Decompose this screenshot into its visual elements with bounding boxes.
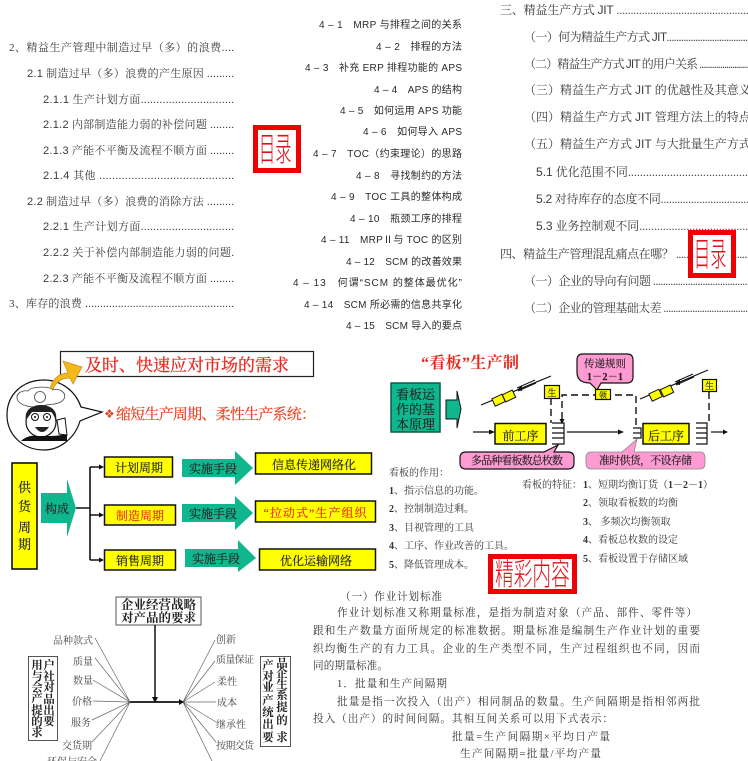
labels: left requirements: 交货期 bbox=[62, 739, 92, 752]
panel: left table of contents: 2.1.4 其他 .......................................... bbox=[43, 168, 234, 182]
panel: middle table of contents: 4 – 6 如何导入 APS bbox=[363, 125, 462, 138]
box: user and society requirements: 求 bbox=[31, 725, 43, 739]
box: next process bbox=[643, 424, 689, 444]
box: transport network: 优化运输网络 bbox=[280, 553, 352, 568]
arrow: composition bbox=[41, 479, 76, 537]
text: production planning standards: 跟和生产数量方面所规定的标准数据。期量标准是编制生产作业计划的重要 bbox=[313, 624, 700, 637]
text: features of kanban: 5、看板设置于存储区域 bbox=[583, 552, 688, 565]
panel: product requirements fishbone bbox=[28, 597, 290, 761]
callout: transfer rule bbox=[577, 354, 633, 390]
panel: left table of contents: 2.2 制造过早（多）浪费的消除方法 ......... bbox=[27, 194, 234, 208]
panel: left table of contents: 2.2.2 关于补偿内部制造能力弱的问题. bbox=[43, 245, 234, 259]
box: enterprise production requirements: 业 bbox=[262, 680, 274, 694]
labels: right requirements: 成本 bbox=[217, 696, 237, 709]
text: features of kanban: 3、 多频次均衡领取 bbox=[583, 515, 670, 528]
text: functions of kanban: 3、目视管理的工具 bbox=[389, 521, 475, 534]
arrow: composition: 构成 bbox=[45, 501, 69, 516]
arrow: implementation 1: 实施手段 bbox=[189, 462, 237, 476]
panel: middle table of contents: 4 – 11 MRPⅡ与 TOC 的区别 bbox=[321, 233, 462, 246]
box: user and society requirements: 对 bbox=[43, 680, 55, 694]
subheading: shorten production cycle: 缩短生产周期、柔性生产系统： bbox=[116, 406, 316, 423]
text: production planning standards: 投入（出产）的时间间隔。其相互间关系可以用下式表示： bbox=[313, 712, 613, 725]
labels: left requirements: 品种款式 bbox=[53, 634, 93, 647]
box: enterprise production requirements: 对 bbox=[262, 669, 274, 683]
panel: middle table of contents: 4 – 7 TOC（约束理论）的思路 bbox=[313, 147, 462, 160]
box: manufacturing cycle: 制造周期 bbox=[116, 508, 164, 523]
box: production kanban right bbox=[702, 380, 716, 392]
connector branches bbox=[76, 464, 104, 562]
stamp: 目录 left: 目录 bbox=[259, 130, 291, 169]
box: production kanban right: 生 bbox=[705, 380, 714, 391]
panel: middle table of contents: 4 – 5 如何运用 APS 功能 bbox=[340, 104, 462, 117]
box: enterprise production requirements: 企 bbox=[276, 666, 288, 680]
box: enterprise production requirements: 产 bbox=[262, 693, 274, 707]
labels: left requirements: 服务 bbox=[71, 716, 91, 729]
box: enterprise production requirements: 统 bbox=[262, 705, 275, 719]
box: withdrawal kanban bbox=[596, 390, 610, 400]
box: supply cycle: 期 bbox=[18, 537, 31, 552]
box: supply cycle: 供 bbox=[18, 480, 32, 495]
box: strategy requirement: 企业经营战略 bbox=[121, 597, 196, 612]
box: strategy requirement: 对产品的要求 bbox=[121, 610, 196, 625]
box: user and society requirements: 品 bbox=[43, 693, 55, 706]
panel: left table of contents: 2.2.3 产能不平衡及流程不顺方面 ........ bbox=[43, 271, 234, 285]
panel: kanban production system bbox=[389, 353, 728, 571]
callout: kanban total count bbox=[460, 445, 574, 469]
arrow: green block arrow bbox=[446, 391, 461, 428]
text: production planning standards: 生产间隔期=批量/平均产量 bbox=[460, 747, 601, 760]
panel: left table of contents: 2.1 制造过早（多）浪费的产生原因 ......... bbox=[27, 66, 234, 80]
box: next process: 后工序 bbox=[648, 428, 684, 443]
subheading: shorten production cycle: ❖ bbox=[104, 407, 115, 421]
box: user and society requirements: 要 bbox=[43, 714, 55, 728]
box: kanban basic principle bbox=[391, 383, 440, 432]
stamp: highlights: 精彩内容 bbox=[495, 558, 570, 592]
box: enterprise production requirements: 生 bbox=[276, 677, 288, 691]
callout: transfer rule: 1－2－1 bbox=[587, 372, 623, 383]
box: user and society requirements: 社 bbox=[43, 669, 55, 683]
fishbone lines bbox=[92, 625, 216, 761]
box: enterprise production requirements: 品 bbox=[276, 657, 288, 670]
box: information network: 信息传递网络化 bbox=[272, 457, 356, 472]
callout: kanban total count: 多品种看板数总枚数 bbox=[471, 453, 563, 467]
text: features of kanban: 4、看板总枚数的设定 bbox=[583, 533, 678, 546]
stamp: 目录 left bbox=[256, 128, 298, 170]
box: supply cycle: 周 bbox=[18, 520, 31, 535]
panel: middle table of contents: 4 – 2 排程的方法 bbox=[376, 40, 462, 53]
text: functions of kanban: 1、指示信息的功能。 bbox=[389, 484, 484, 497]
text: production planning standards bbox=[313, 590, 700, 760]
box: previous process: 前工序 bbox=[502, 428, 539, 443]
callout: transfer rule: 传递规则 bbox=[584, 357, 626, 370]
labels: right requirements: 按期交货 bbox=[216, 739, 255, 752]
text: functions of kanban bbox=[389, 466, 514, 571]
panel: right table of contents: （三）精益生产方式 JIT 的优越性及其意义 bbox=[524, 82, 748, 97]
heading box: respond to market bbox=[60, 352, 314, 376]
panel: middle table of contents: 4 – 9 TOC 工具的整体构成 bbox=[331, 190, 462, 203]
arrow: implementation 1 bbox=[182, 451, 253, 485]
box: enterprise production requirements: 出 bbox=[262, 717, 274, 731]
panel: right table of contents: （四）精益生产方式 JIT 管理方法上的特点 bbox=[524, 109, 748, 124]
box: enterprise production requirements: 要 bbox=[262, 730, 274, 744]
text: production planning standards: 作业计划标准又称期量标准，是指为制造对象（产品、部件、零件等） bbox=[337, 606, 697, 619]
panel: left table of contents: 2.2.1 生产计划方面.............................. bbox=[43, 219, 234, 233]
box: sales cycle bbox=[104, 550, 176, 570]
stamp: 目录 right: 目录 bbox=[694, 235, 726, 274]
text: functions of kanban: 4、工序、作业改善的工具。 bbox=[389, 539, 514, 552]
box: kanban basic principle: 作的基 bbox=[396, 402, 435, 417]
text: production planning standards: 批量是指一次投入（出产）相同制品的数量。生产间隔期是指相邻两批 bbox=[337, 695, 700, 708]
box: planning cycle bbox=[104, 457, 172, 477]
panel: supply cycle diagram bbox=[7, 352, 376, 572]
arrow: implementation 2: 实施手段 bbox=[189, 507, 237, 521]
panel: left table of contents bbox=[9, 40, 234, 310]
box: user and society requirements: 与 bbox=[31, 669, 43, 683]
box: user and society requirements: 提 bbox=[31, 703, 43, 717]
box: user and society requirements bbox=[28, 656, 58, 740]
panel: right table of contents: （五）精益生产方式 JIT 与大批量生产方式 bbox=[524, 136, 748, 151]
icon: yellow curved arrow bbox=[50, 361, 82, 389]
box: pull production: “拉动式”生产组织 bbox=[264, 505, 367, 520]
arrow: implementation 3: 实施手段 bbox=[192, 552, 240, 566]
panel: left table of contents: 2.1.3 产能不平衡及流程不顺方面 ........ bbox=[43, 143, 234, 157]
labels: right requirements: 继承性 bbox=[216, 718, 246, 731]
box: enterprise production requirements: 系 bbox=[276, 688, 288, 702]
labels: right requirements: 创新 bbox=[216, 633, 236, 646]
labels: right requirements bbox=[216, 633, 255, 752]
text: functions of kanban: 2、控制制造过剩。 bbox=[389, 502, 474, 515]
labels: left requirements bbox=[47, 634, 97, 761]
box: production kanban left: 生 bbox=[547, 387, 557, 398]
box: strategy requirement bbox=[116, 597, 201, 625]
text: features of kanban: 1、短期均衡订货（1－2－1） bbox=[583, 478, 713, 491]
box: pull production bbox=[256, 501, 376, 522]
callout: just in time delivery bbox=[586, 439, 705, 469]
box: user and society requirements: 的 bbox=[31, 714, 43, 728]
labels: left requirements: 价格 bbox=[72, 695, 92, 708]
panel: left table of contents: 2、精益生产管理中制造过早（多）的浪费.... bbox=[9, 40, 234, 54]
panel: middle table of contents bbox=[293, 18, 462, 332]
text: features of kanban: 看板的特征： bbox=[522, 478, 582, 491]
box: user and society requirements: 出 bbox=[43, 703, 55, 717]
labels: left requirements: 数量 bbox=[73, 674, 93, 687]
text: production planning standards: 同的期量标准。 bbox=[313, 659, 388, 672]
text: production planning standards: 织均衡生产的有力工具。企业的生产类型不同，生产过程组织也不同，因而 bbox=[313, 642, 700, 655]
panel: middle table of contents: 4 – 15 SCM 导入的要点 bbox=[346, 319, 462, 332]
panel: left table of contents: 2.1.2 内部制造能力弱的补偿问题 ........ bbox=[43, 117, 234, 131]
box: supply cycle bbox=[12, 463, 37, 569]
arrow: implementation 2 bbox=[182, 496, 253, 530]
box: enterprise production requirements bbox=[260, 656, 290, 746]
box: user and society requirements: 产 bbox=[31, 691, 43, 705]
box: withdrawal kanban: 领 bbox=[599, 390, 608, 400]
icon: thinking man in speech bubble bbox=[7, 380, 102, 450]
text: features of kanban bbox=[522, 478, 713, 565]
panel: middle table of contents: 4 – 1 MRP 与排程之间的关系 bbox=[319, 18, 462, 31]
panel: left table of contents: 3、库存的浪费 .................................................. bbox=[9, 296, 234, 310]
box: enterprise production requirements: 求 bbox=[276, 730, 288, 744]
box: previous process bbox=[495, 424, 546, 444]
box: enterprise production requirements: 产 bbox=[262, 658, 274, 672]
diagram: kanban flow lines bbox=[473, 370, 728, 444]
box: supply cycle: 货 bbox=[18, 499, 32, 514]
text: features of kanban: 2、领取看板数的均衡 bbox=[583, 496, 678, 509]
box: sales cycle: 销售周期 bbox=[116, 553, 164, 568]
box: transport network bbox=[260, 549, 376, 570]
text: functions of kanban: 看板的作用： bbox=[389, 466, 449, 479]
panel: middle table of contents: 4 – 8 寻找制约的方法 bbox=[356, 169, 462, 182]
panel: left table of contents: 2.1.1 生产计划方面.............................. bbox=[43, 92, 234, 106]
box: kanban basic principle: 看板运 bbox=[396, 387, 436, 402]
labels: left requirements: 质量 bbox=[73, 655, 93, 668]
labels: right requirements: 柔性 bbox=[217, 675, 237, 688]
stamp: 目录 right bbox=[690, 232, 734, 276]
text: production planning standards: 批量=生产间隔期×平均日产量 bbox=[452, 730, 610, 743]
box: user and society requirements: 户 bbox=[43, 658, 55, 672]
heading box: respond to market: 及时、快速应对市场的需求 bbox=[85, 356, 289, 375]
text: functions of kanban: 5、降低管理成本。 bbox=[389, 558, 474, 571]
panel: middle table of contents: 4 – 10 瓶颈工序的排程 bbox=[350, 212, 462, 225]
panel: right table of contents bbox=[500, 2, 748, 315]
box: user and society requirements: 用 bbox=[31, 658, 43, 672]
heading: kanban: “看板”生产制 bbox=[421, 353, 519, 372]
box: enterprise production requirements: 提 bbox=[276, 700, 288, 714]
text: production planning standards: （一）作业计划标准 bbox=[340, 590, 442, 603]
box: manufacturing cycle bbox=[104, 505, 176, 525]
text: production planning standards: 1．批量和生产间隔期 bbox=[337, 677, 447, 690]
arrow: implementation 3 bbox=[185, 540, 256, 572]
callout: just in time delivery: 准时供货，不设存储 bbox=[599, 453, 692, 467]
box: enterprise production requirements: 的 bbox=[276, 713, 288, 727]
box: user and society requirements: 会 bbox=[31, 680, 43, 694]
panel: middle table of contents: 4 – 12 SCM 的改善效果 bbox=[346, 255, 462, 268]
panel: middle table of contents: 4 – 3 补充 ERP 排程功能的 APS bbox=[305, 61, 462, 74]
box: production kanban left bbox=[544, 386, 560, 398]
box: information network bbox=[256, 453, 372, 474]
box: kanban basic principle: 本原理 bbox=[396, 417, 435, 432]
box: planning cycle: 计划周期 bbox=[115, 460, 163, 475]
panel: middle table of contents: 4 – 4 APS 的结构 bbox=[374, 83, 462, 96]
panel: middle table of contents: 4 – 13 何谓“SCM 的整体最优化” bbox=[293, 276, 462, 289]
panel: middle table of contents: 4 – 14 SCM 所必需的信息共享化 bbox=[304, 298, 462, 311]
labels: right requirements: 质量保证 bbox=[216, 653, 254, 666]
